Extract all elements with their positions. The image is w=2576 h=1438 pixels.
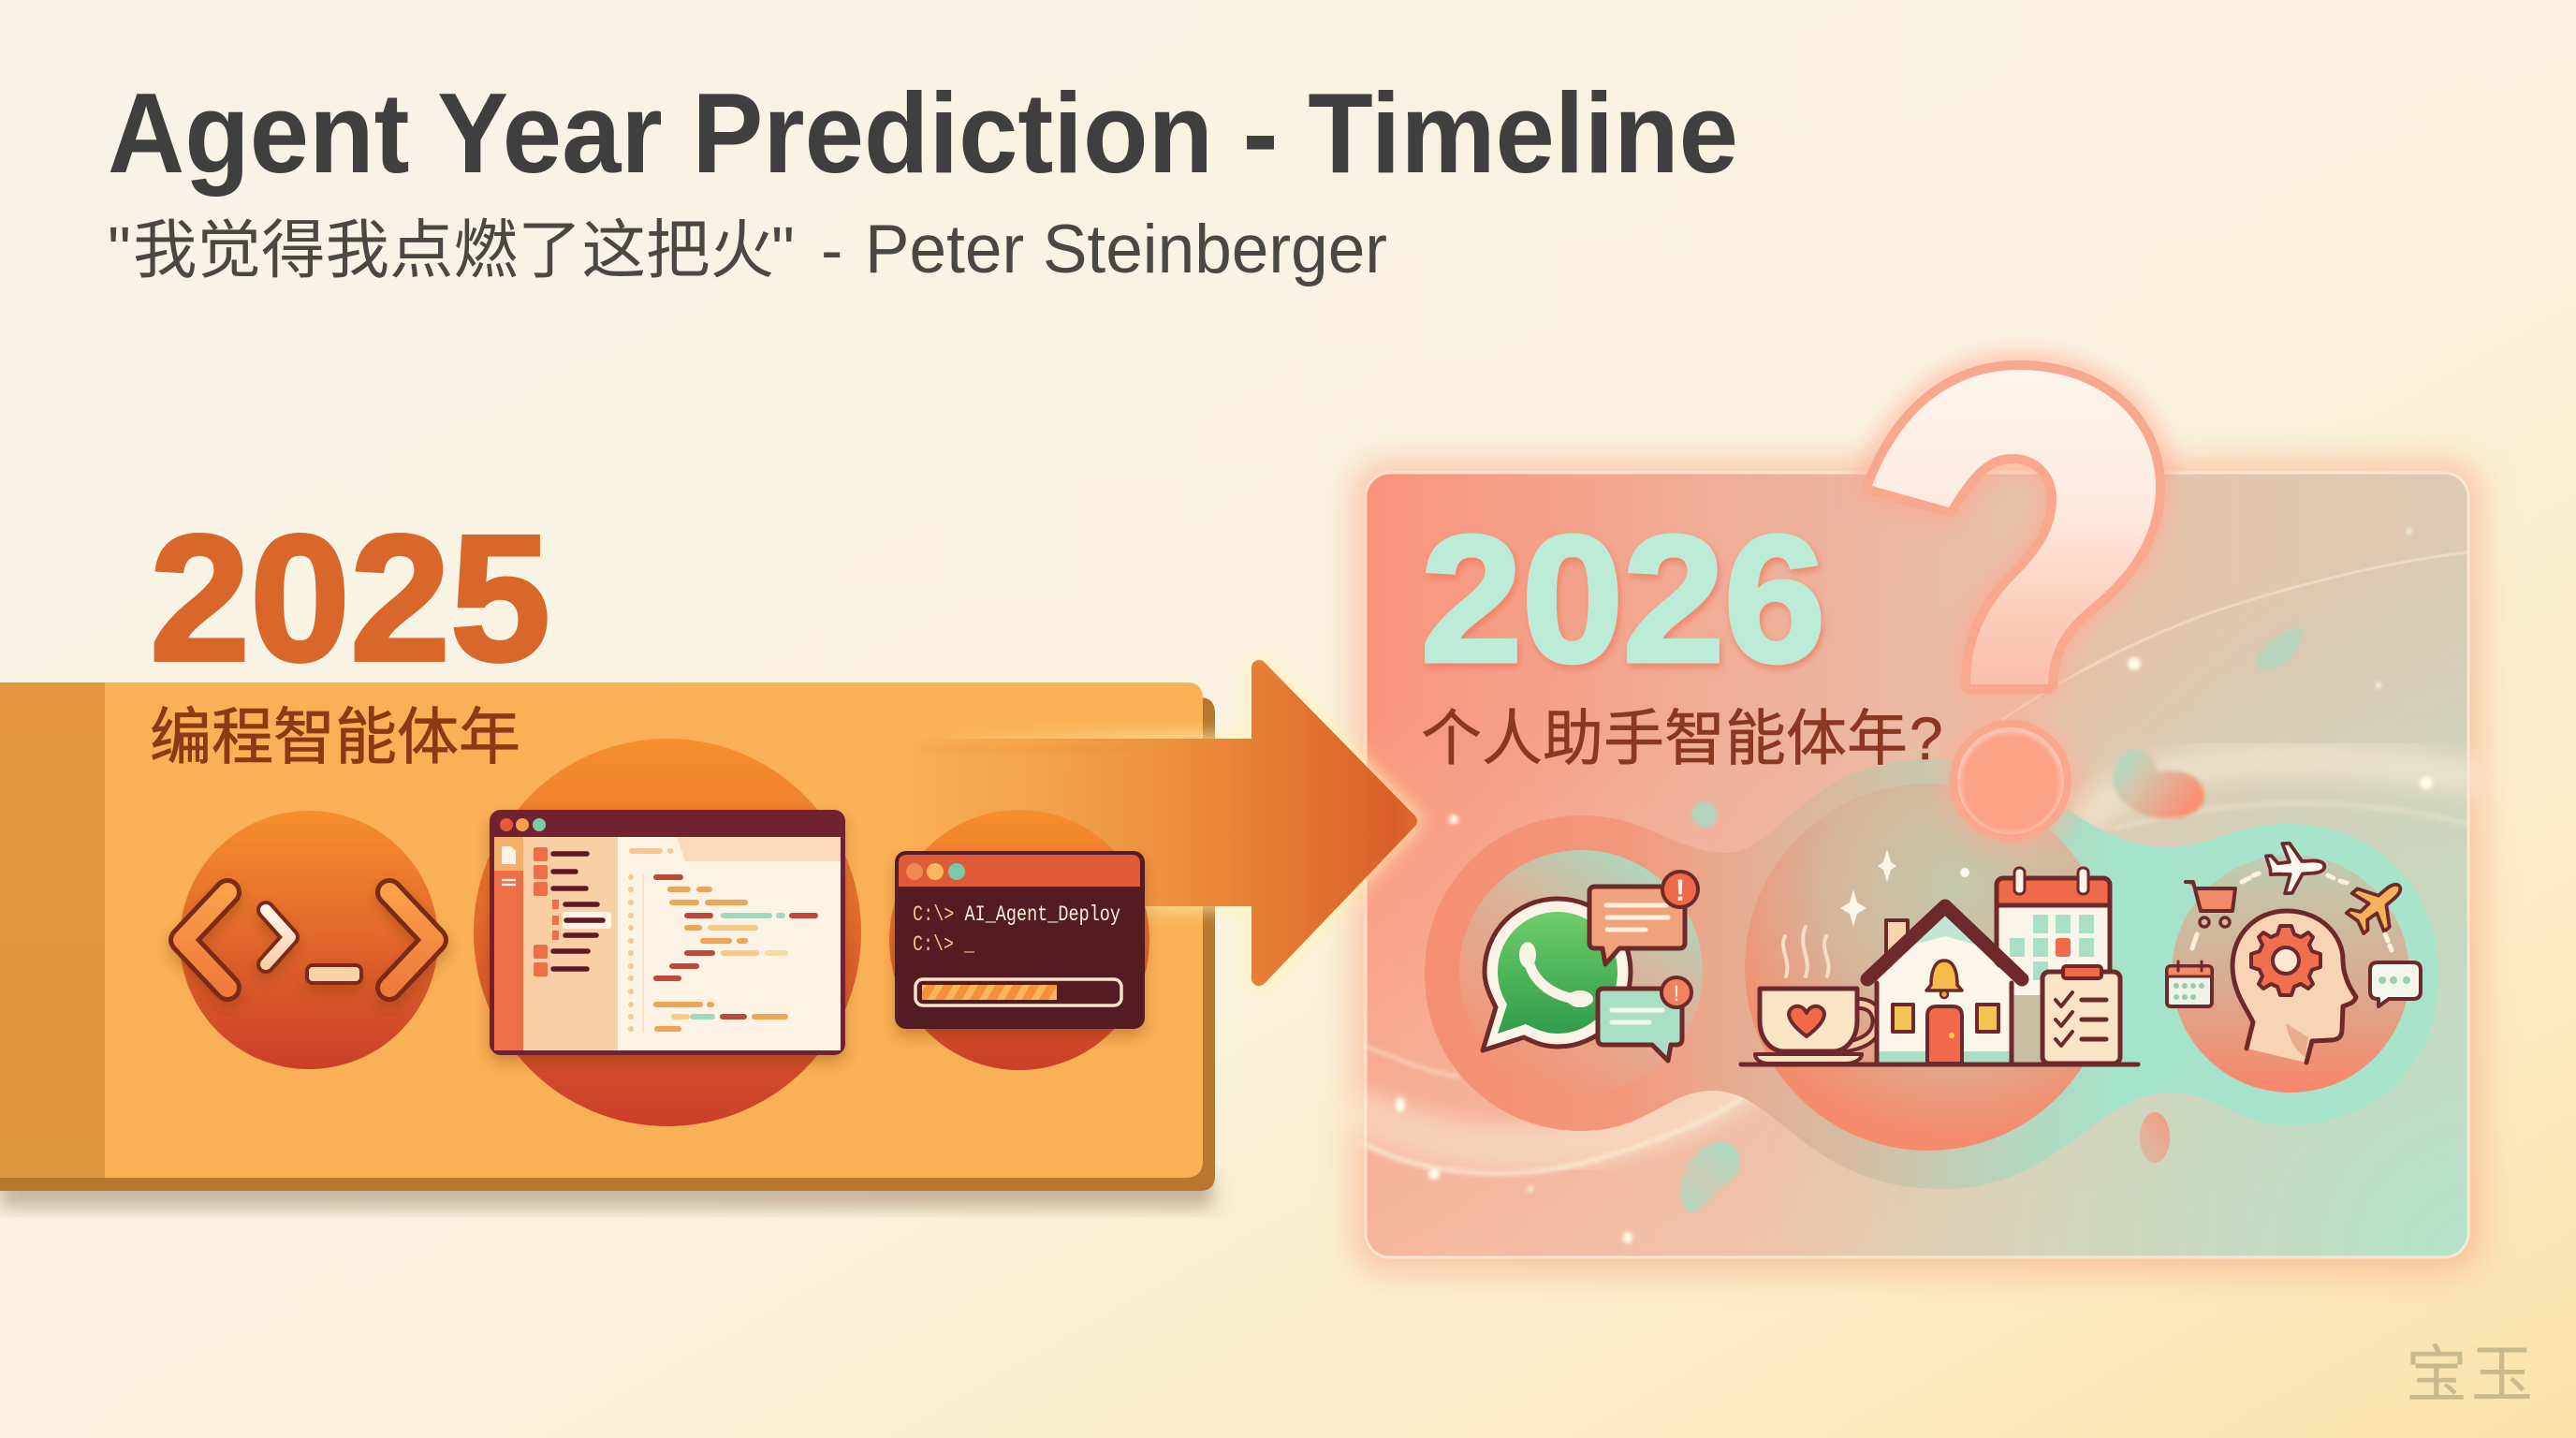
steam [1783, 927, 1829, 976]
code lines [632, 851, 815, 1029]
circle: code backdrop [180, 811, 438, 1069]
progress bar [915, 979, 1121, 1005]
heading: coding agent year: 编程智能体年 [150, 702, 520, 771]
icon: head with gear and surrounding tasks [2167, 842, 2421, 1063]
watermark: 宝玉 [2406, 1340, 2537, 1409]
terminal text: C:\> AI_Agent_Deploy [913, 902, 1120, 927]
icon: WhatsApp with chat bubbles: ! [1674, 981, 1679, 1006]
circle: mind backdrop [2172, 855, 2409, 1093]
icon: home scene with coffee, house, calendar, checklist [1741, 849, 2138, 1064]
subtitle quote: 我觉得我点燃了这把火 [133, 214, 774, 286]
gutter [628, 874, 634, 1032]
coffee cup [1846, 1004, 1878, 1047]
subtitle quote: Peter Steinberger [865, 212, 1387, 287]
subtitle quote: - [821, 213, 842, 286]
circle: terminal backdrop [889, 810, 1149, 1070]
year label: 2025: 2025 [150, 497, 550, 698]
icon: WhatsApp with chat bubbles [1483, 872, 1698, 1061]
subtitle quote: " [108, 213, 131, 286]
heading: personal assistant agent year: 个人助手智能体年 [1421, 704, 1908, 772]
baseline [1741, 1062, 2138, 1067]
icon: WhatsApp with chat bubbles: ! [1676, 873, 1685, 907]
subtitle quote: " [771, 213, 795, 286]
arrow to 2026 [914, 668, 1410, 978]
circle: home backdrop [1745, 784, 2112, 1151]
calendar [1997, 868, 2110, 1064]
icon: terminal window [895, 851, 1145, 1029]
icon: code prompt brackets [183, 892, 434, 988]
calendar small [2167, 966, 2212, 1006]
big question mark [1872, 370, 2156, 854]
heading: personal assistant agent year: ? [1910, 705, 1943, 772]
icon: terminal window: C:\> _ [913, 932, 974, 957]
title: Agent Year Prediction - Timeline [108, 69, 1738, 197]
shopping cart [2186, 882, 2235, 911]
floating droplets [1681, 627, 2302, 1213]
plane orange [2339, 867, 2415, 943]
dashed route [2192, 873, 2392, 950]
speech bubble small [2370, 962, 2421, 1006]
blob: three connected lobes [1425, 759, 2439, 1189]
file tree [534, 847, 559, 976]
year label: 2026: 2026 [1421, 498, 1825, 699]
sparkle dots [1396, 528, 2433, 1243]
panel: 2026 personal assistant [1354, 462, 2481, 1271]
circle: messaging backdrop [1459, 850, 1703, 1093]
panel: 2025 coding agent [0, 682, 1215, 1208]
checklist [2042, 972, 2120, 1064]
flowing swirls [1365, 552, 2467, 1173]
circle: IDE backdrop [474, 739, 861, 1126]
plane white [2265, 842, 2326, 894]
house [1886, 920, 1908, 967]
sparkles [1840, 849, 1896, 927]
icon: code editor window [490, 810, 845, 1055]
